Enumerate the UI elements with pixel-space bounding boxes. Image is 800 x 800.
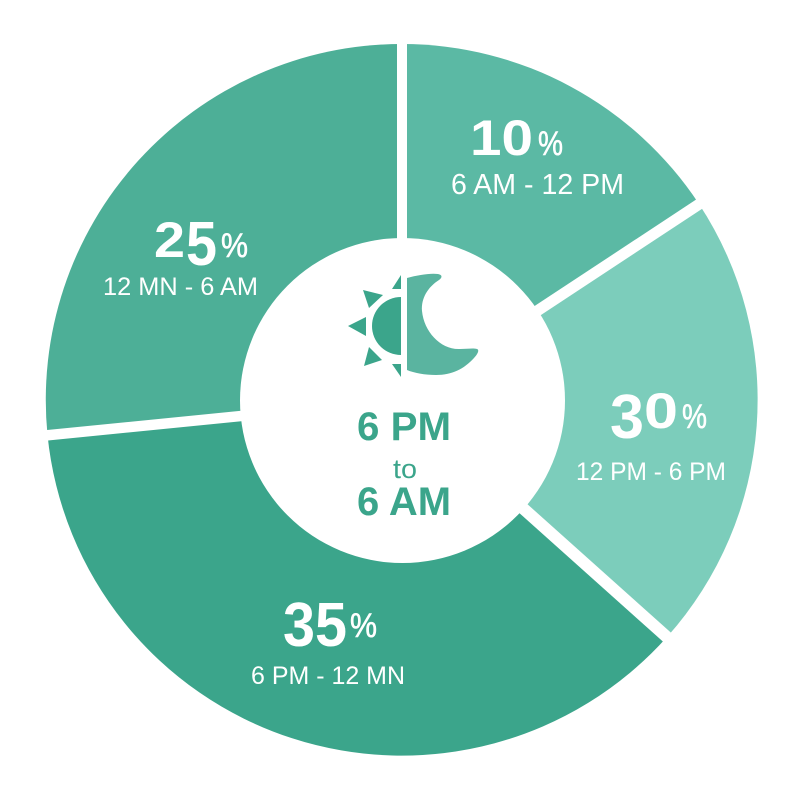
label: 35%: %: [350, 607, 377, 645]
segment: 30% 12 PM - 6 PM: [402, 204, 758, 637]
label: 10%: [451, 110, 624, 201]
icon: moon: [407, 274, 478, 375]
label: 25%: 12 MN - 6 AM: [103, 273, 258, 301]
segment dividers: [30, 30, 710, 647]
label: 30%: 3: [610, 383, 644, 452]
center label: 6 PM: [357, 405, 451, 449]
center label: 6 AM: [357, 480, 451, 524]
label: 25%: 5: [186, 210, 217, 279]
label: 25%: 2: [154, 212, 185, 268]
label: 35%: 6 PM - 12 MN: [251, 662, 405, 690]
label: 25%: %: [221, 227, 248, 265]
label: 35%: [251, 591, 405, 690]
label: 30%: 0: [644, 383, 678, 439]
label: 30%: 12 PM - 6 PM: [576, 458, 726, 486]
segment: 35% 6 PM - 12 MN: [48, 400, 667, 756]
center hole: [240, 238, 565, 563]
segment: 10% 6 AM - 12 PM: [402, 44, 699, 400]
label: 10%: %: [538, 125, 563, 163]
label: 30%: %: [682, 398, 707, 436]
center label: to: [393, 454, 417, 484]
label: 25%: [103, 210, 258, 301]
icon: sun: [348, 275, 401, 377]
label: 10%: 10: [470, 110, 533, 166]
center label: [357, 405, 451, 524]
label: 35%: 5: [315, 591, 347, 660]
label: 10%: 6 AM - 12 PM: [451, 169, 624, 201]
label: 30%: [576, 383, 726, 486]
label: 35%: 3: [283, 591, 315, 660]
icon: sun and moon: [348, 274, 478, 377]
segment: 25% 12 MN - 6 AM: [46, 44, 402, 435]
